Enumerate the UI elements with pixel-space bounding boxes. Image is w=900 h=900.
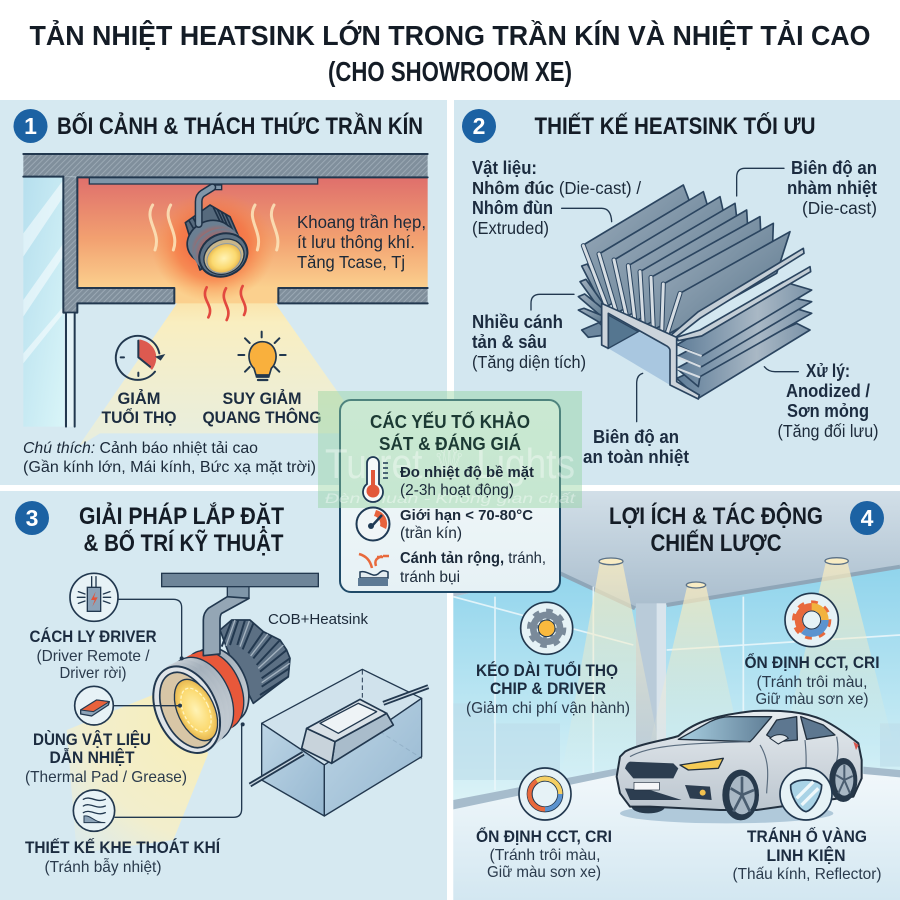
callout: biên độ an nhàm nhiệt: Biên độ an	[791, 158, 877, 178]
panel 3 badge: 3	[26, 505, 38, 531]
benefit: ổn định CCT top	[744, 653, 880, 708]
caption: Chú thích: Cảnh báo nhiệt tải cao	[23, 440, 258, 457]
item: đo nhiệt độ	[400, 464, 534, 499]
benefit: tránh ố vàng: TRÁNH Ố VÀNG	[747, 826, 867, 846]
panel 3 heading	[79, 501, 284, 557]
lower right fins	[677, 282, 812, 398]
illustration: ceiling cavity with lamp	[23, 154, 428, 447]
callout: vật liệu dẫn nhiệt: DÙNG VẬT LIỆU	[33, 730, 151, 749]
panel: thiết kế heatsink	[454, 100, 900, 485]
watermark: Turret ♕ Lights	[325, 440, 575, 487]
heatsink barrel	[220, 620, 290, 703]
title: TẢN NHIỆT HEATSINK LỚN TRONG TRẦN KÍN VÀ NHIỆT TẢI CAO	[30, 19, 870, 51]
caption: (Gần kính lớn, Mái kính, Bức xạ mặt trời)	[23, 459, 316, 476]
item: giới hạn: Giới hạn < 70-80°C	[400, 507, 533, 524]
cavity note: Tăng Tcase, Tj	[297, 252, 405, 272]
callout: vật liệu: Nhôm đùn	[472, 198, 553, 218]
icon: gear colored	[785, 593, 838, 647]
callout: nhiều cánh tản: (Tăng diện tích)	[472, 352, 586, 372]
panel 2 badge: 2	[473, 113, 485, 139]
icon: thermal pad	[75, 686, 113, 725]
callout: xử lý: (Tăng đối lưu)	[778, 421, 878, 441]
callout: nhiều cánh tản: tản & sâu	[472, 332, 547, 352]
box title	[370, 411, 530, 454]
callout: nhiều cánh tản: Nhiều cánh	[472, 312, 563, 332]
callout: cách ly driver: Driver rời)	[60, 665, 126, 682]
callout: biên độ an nhàm nhiệt: (Die-cast)	[802, 198, 877, 218]
watermark	[318, 391, 582, 508]
caption	[23, 440, 316, 476]
bracket arm	[203, 587, 249, 656]
callout: cách ly driver	[30, 627, 157, 682]
cavity note: Khoang trần hẹp,	[297, 212, 426, 232]
callout: vật liệu dẫn nhiệt: (Thermal Pad / Grease)	[25, 769, 187, 786]
callout: xử lý: Sơn mỏng	[787, 401, 869, 421]
icon: lens shield	[780, 768, 832, 820]
item: cánh tản: tránh bụi	[400, 569, 460, 586]
callout: vật liệu dẫn nhiệt	[25, 730, 187, 786]
icon: gear yellow	[521, 602, 573, 654]
icon: air vent	[73, 790, 115, 831]
callout: biên độ an nhàm nhiệt: nhàm nhiệt	[787, 178, 877, 198]
panel 4 badge	[850, 501, 884, 535]
panel: giải pháp lắp đặt	[0, 491, 447, 900]
callout: khe thoát khí: THIẾT KẾ KHE THOÁT KHÍ	[25, 838, 220, 857]
center box: các yếu tố khảo sát	[318, 391, 582, 592]
cavity note: ít lưu thông khí.	[297, 232, 415, 252]
installation illustration	[67, 573, 428, 853]
callout: khe thoát khí: (Tránh bẫy nhiệt)	[44, 857, 162, 876]
cavity note	[297, 212, 426, 272]
benefit: tránh ố vàng: LINH KIỆN	[766, 846, 846, 865]
callout: vật liệu	[472, 158, 641, 238]
driver box	[250, 669, 428, 816]
channel and extruded body	[602, 303, 699, 399]
callout: vật liệu: Vật liệu:	[472, 158, 537, 178]
benefit: ổn định CCT top: ỔN ĐỊNH CCT, CRI	[744, 653, 880, 672]
callout: biên độ an toàn nhiệt: Biên độ an	[593, 427, 679, 447]
benefit: ổn định CCT bottom: Giữ màu sơn xe)	[487, 864, 601, 881]
panel: bối cảnh và thách thức	[0, 100, 447, 485]
callout: khe thoát khí	[25, 838, 220, 876]
benefit: tránh ố vàng	[732, 826, 882, 883]
panel 2 heading: THIẾT KẾ HEATSINK TỐI ƯU	[534, 112, 816, 140]
callout: xử lý: Anodized /	[786, 381, 870, 401]
title	[30, 19, 870, 87]
label: suy giảm quang thông: QUANG THÔNG	[202, 408, 322, 427]
left stub fins	[578, 264, 609, 337]
item: cánh tản: Cánh tản rộng, tránh,	[400, 550, 546, 567]
callout: cách ly driver: (Driver Remote /	[36, 648, 150, 665]
benefit: kéo dài tuổi thọ: CHIP & DRIVER	[490, 680, 606, 698]
panel 4 badge: 4	[861, 505, 874, 531]
callout: biên độ an toàn nhiệt	[583, 427, 689, 467]
panel 1 badge: 1	[24, 113, 37, 139]
label: suy giảm quang thông	[202, 389, 322, 427]
panel 4 heading	[609, 502, 823, 557]
panel 2 badge	[462, 109, 496, 143]
heat waves	[150, 205, 278, 320]
lamp	[180, 185, 255, 284]
item: giới hạn: (trần kín)	[400, 525, 462, 542]
item: giới hạn	[400, 507, 533, 542]
icon: light bulb	[238, 332, 286, 380]
panel 4 heading: LỢI ÍCH & TÁC ĐỘNG	[609, 502, 823, 530]
label: COB+Heatsink: COB+Heatsink	[268, 611, 369, 628]
leader lines	[118, 599, 182, 658]
panel 3 heading: GIẢI PHÁP LẮP ĐẶT	[79, 501, 284, 530]
panel 4 heading: CHIẾN LƯỢC	[650, 529, 782, 557]
top fan fins	[583, 185, 811, 341]
label: giảm tuổi thọ: TUỔI THỌ	[102, 408, 177, 427]
title: (CHO SHOWROOM XE)	[328, 56, 572, 87]
item: cánh tản	[400, 550, 546, 586]
showroom background	[453, 491, 900, 900]
label: giảm tuổi thọ: GIẢM	[118, 389, 160, 408]
callout: vật liệu dẫn nhiệt: DẪN NHIỆT	[50, 748, 134, 767]
label: giảm tuổi thọ	[102, 389, 177, 427]
callout: biên độ an nhàm nhiệt	[787, 158, 877, 218]
panel 3 heading: & BỐ TRÍ KỸ THUẬT	[84, 529, 284, 557]
benefit: ổn định CCT top: (Tránh trôi màu,	[756, 674, 868, 691]
callout: xử lý	[778, 361, 878, 441]
heatsink illustration	[531, 168, 812, 422]
panel 3 badge	[15, 501, 49, 535]
label: suy giảm quang thông: SUY GIẢM	[222, 389, 302, 408]
benefit: kéo dài tuổi thọ: (Giảm chi phí vận hành)	[466, 700, 630, 717]
watermark: Đèn chuẩn - Không gian chất	[325, 490, 577, 506]
icon: fins airflow	[358, 554, 389, 586]
icon: thermometer	[363, 457, 388, 502]
benefit: ổn định CCT bottom: ỔN ĐỊNH CCT, CRI	[476, 827, 612, 846]
callout: biên độ an toàn nhiệt: an toàn nhiệt	[583, 447, 689, 467]
callout: cách ly driver: CÁCH LY ĐRIVER	[30, 627, 157, 646]
icon: color ring	[519, 768, 571, 820]
benefit: kéo dài tuổi thọ: KÉO DÀI TUỔI THỌ	[476, 661, 618, 680]
lamp body	[140, 638, 260, 764]
benefit: ổn định CCT bottom: (Tránh trôi màu,	[490, 847, 600, 864]
icon: driver isolation	[70, 573, 118, 621]
panel 1 heading: BỐI CẢNH & THÁCH THỨC TRẦN KÍN	[57, 111, 423, 140]
benefit: ổn định CCT top: Giữ màu sơn xe)	[756, 691, 868, 708]
benefit: tránh ố vàng: (Thấu kính, Reflector)	[732, 866, 882, 883]
item: đo nhiệt độ: (2-3h hoạt động)	[400, 482, 514, 499]
icon: gauge	[356, 508, 390, 540]
item: đo nhiệt độ: Đo nhiệt độ bề mặt	[400, 464, 534, 481]
box title: CÁC YẾU TỐ KHẢO	[370, 411, 530, 432]
panel 1 badge	[14, 109, 48, 143]
box title: SÁT & ĐÁNG GIÁ	[379, 433, 521, 454]
benefit: ổn định CCT bottom	[476, 827, 612, 881]
icon: clock	[116, 336, 165, 380]
benefit: kéo dài tuổi thọ	[466, 661, 630, 717]
panel: lợi ích và tác động	[453, 491, 900, 900]
callout: vật liệu: Nhôm đúc (Die-cast) /	[472, 178, 641, 198]
callout: nhiều cánh tản	[472, 312, 586, 372]
car	[617, 711, 862, 823]
callout: vật liệu: (Extruded)	[472, 218, 549, 238]
callout: xử lý: Xử lý:	[806, 361, 850, 381]
leader lines	[562, 208, 612, 222]
